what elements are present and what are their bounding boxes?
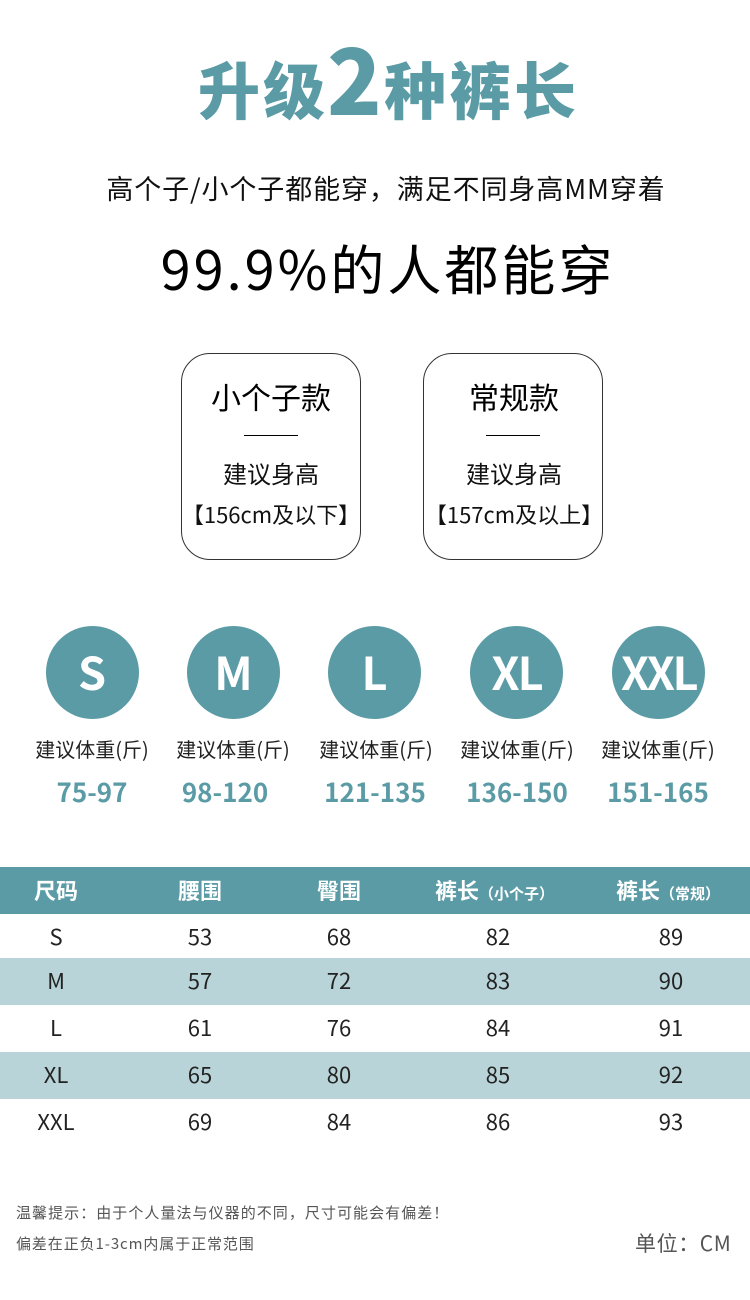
table header: 臀围: [317, 874, 361, 906]
size XL circle: XL: [491, 638, 542, 703]
size M circle: [187, 626, 280, 719]
row XL: [0, 1052, 750, 1099]
row XL: 92: [659, 1058, 683, 1090]
row M: M: [47, 964, 65, 996]
row S: [49, 920, 683, 952]
weight label S: 建议体重(斤): [35, 734, 149, 763]
size XXL circle: XXL: [621, 638, 696, 703]
height label: 建议身高: [223, 455, 319, 490]
row M: 83: [486, 964, 510, 996]
size XL circle: [470, 626, 563, 719]
row XL: 65: [188, 1058, 212, 1090]
row XXL: [37, 1105, 683, 1137]
style name: 小个子款: [211, 374, 331, 418]
weight label M: 建议体重(斤): [176, 734, 290, 763]
divider: [244, 435, 298, 436]
row L: L: [50, 1011, 62, 1043]
row S: 82: [486, 920, 510, 952]
row XXL: 93: [659, 1105, 683, 1137]
table header: 裤长（常规）: [616, 874, 720, 906]
size S circle: S: [78, 638, 106, 703]
row M: 57: [188, 964, 212, 996]
row XXL: 69: [188, 1105, 212, 1137]
height value: 【157cm及以上】: [425, 498, 603, 530]
title: 升级: [198, 42, 328, 132]
row XL: 80: [327, 1058, 351, 1090]
size M circle: M: [214, 638, 253, 703]
row M: 72: [327, 964, 351, 996]
row S: 53: [188, 920, 212, 952]
table header: 裤长（小个子）: [435, 874, 554, 906]
divider: [486, 435, 540, 436]
row M: [0, 958, 750, 1005]
table header: 腰围: [178, 874, 222, 906]
weight label XXL: 建议体重(斤): [601, 734, 715, 763]
row L: [50, 1011, 683, 1043]
size XXL circle: [612, 626, 705, 719]
row XL: XL: [44, 1058, 68, 1090]
row L: 61: [188, 1011, 212, 1043]
unit label: 单位：CM: [635, 1228, 731, 1258]
title: [198, 11, 579, 141]
size S circle: [46, 626, 139, 719]
row L: 84: [486, 1011, 510, 1043]
subtitle: 高个子/小个子都能穿，满足不同身高MM穿着: [106, 168, 666, 207]
title: 种裤长: [384, 42, 579, 132]
panel: regular style: [423, 353, 603, 560]
row L: 76: [327, 1011, 351, 1043]
weight label XL: 建议体重(斤): [460, 734, 574, 763]
note line 2: 偏差在正负1-3cm内属于正常范围: [16, 1233, 255, 1254]
note line 1: 温馨提示：由于个人量法与仪器的不同，尺寸可能会有偏差！: [16, 1202, 449, 1223]
style name: 常规款: [469, 374, 559, 418]
table header: 尺码: [34, 874, 78, 906]
weight value L: 121-135: [324, 773, 426, 810]
height label: 建议身高: [466, 455, 562, 490]
title: 2: [327, 11, 382, 141]
height value: 【156cm及以下】: [182, 498, 360, 530]
size L circle: [328, 626, 421, 719]
row S: 89: [659, 920, 683, 952]
panel: petite style: [181, 353, 361, 560]
headline: 99.9%的人都能穿: [161, 227, 615, 306]
size L circle: L: [361, 638, 388, 703]
row M: 90: [659, 964, 683, 996]
weight value S: 75-97: [57, 773, 127, 810]
size table: [0, 867, 750, 1137]
table header: [0, 867, 750, 914]
row XXL: 86: [486, 1105, 510, 1137]
weight value M: 98-120: [182, 773, 268, 810]
row S: S: [49, 920, 63, 952]
weight label L: 建议体重(斤): [319, 734, 433, 763]
row L: 91: [659, 1011, 683, 1043]
row XXL: XXL: [37, 1105, 75, 1137]
row XL: 85: [486, 1058, 510, 1090]
row S: 68: [327, 920, 351, 952]
weight value XL: 136-150: [466, 773, 568, 810]
weight value XXL: 151-165: [607, 773, 709, 810]
row XXL: 84: [327, 1105, 351, 1137]
